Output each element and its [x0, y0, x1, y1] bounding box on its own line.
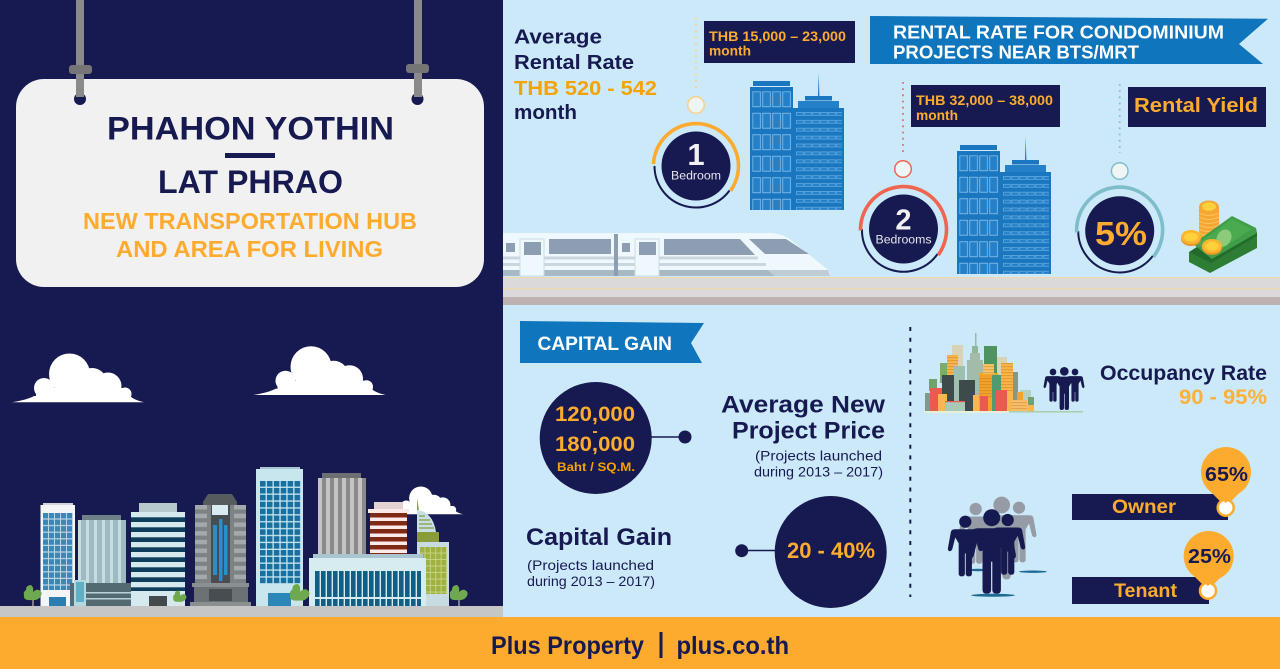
marker dot	[1111, 163, 1128, 179]
badge	[869, 194, 938, 264]
building 2	[70, 515, 131, 606]
average new project price text: Average New	[721, 392, 885, 419]
icon: three residents	[1044, 367, 1084, 410]
rental banner: PROJECTS NEAR BTS/MRT	[893, 42, 1140, 63]
building 4	[190, 494, 251, 606]
building 6	[318, 473, 366, 555]
average new project price text	[721, 392, 885, 480]
occupancy rate text: Occupancy Rate	[1100, 360, 1267, 385]
two bedroom marker	[860, 82, 946, 272]
ring	[860, 187, 946, 272]
building icon one	[750, 73, 844, 210]
price circle: Baht / SQ.M.	[557, 460, 635, 474]
average new project price text: Project Price	[732, 418, 885, 445]
price box two bedrooms: month	[916, 108, 958, 123]
building 3	[131, 503, 185, 606]
average rental rate text: Rental Rate	[514, 51, 634, 74]
subtitle: NEW TRANSPORTATION HUB	[83, 208, 417, 234]
icon: colourful city	[924, 333, 1083, 413]
dotted leader	[902, 82, 904, 152]
average rental rate text: month	[514, 101, 577, 124]
cloud behind buildings	[388, 486, 463, 514]
subtitle: AND AREA FOR LIVING	[116, 236, 383, 262]
rental yield marker: 5%	[1095, 215, 1147, 252]
tenant pin: 25%	[1188, 545, 1231, 568]
one bedroom marker	[654, 18, 738, 208]
cloud right	[254, 346, 386, 395]
one bedroom marker: 1	[687, 137, 705, 172]
average new project price text: during 2013 – 2017)	[754, 464, 883, 480]
sign board	[16, 79, 484, 287]
capital gain banner	[520, 321, 704, 363]
dotted leader	[695, 18, 697, 88]
building icon two	[957, 137, 1051, 274]
dotted leader	[1119, 84, 1121, 153]
banknotes	[1189, 216, 1257, 273]
building 1	[40, 503, 75, 606]
capital gain banner: CAPITAL GAIN	[538, 334, 672, 355]
average rental rate text	[514, 26, 657, 124]
left panel: navy background	[0, 0, 503, 617]
coin stack	[1199, 200, 1219, 242]
title: PHAHON YOTHIN	[107, 110, 394, 146]
price box one bedroom: THB 15,000 – 23,000	[709, 29, 846, 44]
building 8	[309, 554, 426, 606]
ground strip	[0, 606, 503, 617]
price box one bedroom: month	[709, 44, 751, 59]
rental banner	[870, 16, 1268, 64]
occupancy rate text	[1100, 360, 1267, 409]
subtitle	[83, 208, 417, 262]
capital gain text	[526, 524, 672, 589]
hanging sign	[16, 0, 484, 287]
building 9	[417, 498, 449, 606]
average rental rate text: Average	[514, 26, 602, 48]
tenant bar	[1072, 531, 1234, 604]
loose coins	[1181, 230, 1222, 255]
capital gain text: during 2013 – 2017)	[527, 573, 655, 589]
owner bar	[1072, 447, 1251, 520]
rental yield box	[1128, 87, 1266, 127]
capital gain text: Capital Gain	[526, 524, 672, 551]
owner pin: 65%	[1205, 463, 1248, 486]
capital gain circle	[735, 496, 887, 608]
title	[107, 110, 394, 200]
ring	[654, 124, 738, 208]
capital gain circle: 20 - 40%	[787, 538, 875, 563]
owner bar: Owner	[1112, 496, 1176, 518]
price circle: 180,000	[555, 432, 635, 456]
tenant pin	[1184, 531, 1234, 599]
owner pin	[1201, 447, 1251, 516]
tenant bar: Tenant	[1114, 580, 1177, 602]
footer bar: Plus Property	[491, 632, 644, 660]
train	[503, 233, 830, 276]
icon: crowd of people	[948, 497, 1047, 597]
footer bar: plus.co.th	[676, 632, 789, 660]
price circle: -	[592, 423, 598, 440]
price circle	[540, 382, 692, 494]
right panel: light blue background	[503, 0, 1280, 617]
average new project price text: (Projects launched	[755, 448, 882, 464]
building 7	[368, 502, 409, 554]
average rental rate text: THB 520 - 542	[514, 77, 657, 100]
railway track	[503, 277, 1280, 305]
price circle: 120,000	[555, 402, 635, 426]
price box two bedrooms: THB 32,000 – 38,000	[916, 93, 1053, 108]
badge	[662, 132, 730, 200]
sign rods	[69, 0, 429, 97]
price box one bedroom	[704, 21, 855, 63]
rental banner: RENTAL RATE FOR CONDOMINIUM	[893, 21, 1224, 42]
sign holes and rod ends	[74, 73, 424, 105]
price box two bedrooms	[911, 85, 1060, 127]
ring	[1077, 187, 1163, 272]
one bedroom marker: Bedroom	[671, 170, 721, 182]
two bedroom marker: 2	[895, 204, 912, 236]
occupancy rate text: 90 - 95%	[1179, 384, 1267, 409]
marker dot	[895, 161, 911, 177]
building 5	[256, 467, 303, 606]
marker dot	[688, 97, 704, 113]
rental yield marker	[1077, 84, 1163, 272]
rental yield box: Rental Yield	[1134, 94, 1258, 117]
badge	[1085, 196, 1154, 265]
city skyline	[24, 467, 468, 607]
cloud left	[12, 354, 144, 402]
two bedroom marker: Bedrooms	[876, 234, 932, 246]
capital gain text: (Projects launched	[527, 557, 654, 573]
trees	[24, 584, 468, 607]
title: LAT PHRAO	[158, 164, 343, 200]
footer bar	[0, 617, 1280, 669]
icon: money and coins	[1181, 200, 1257, 273]
